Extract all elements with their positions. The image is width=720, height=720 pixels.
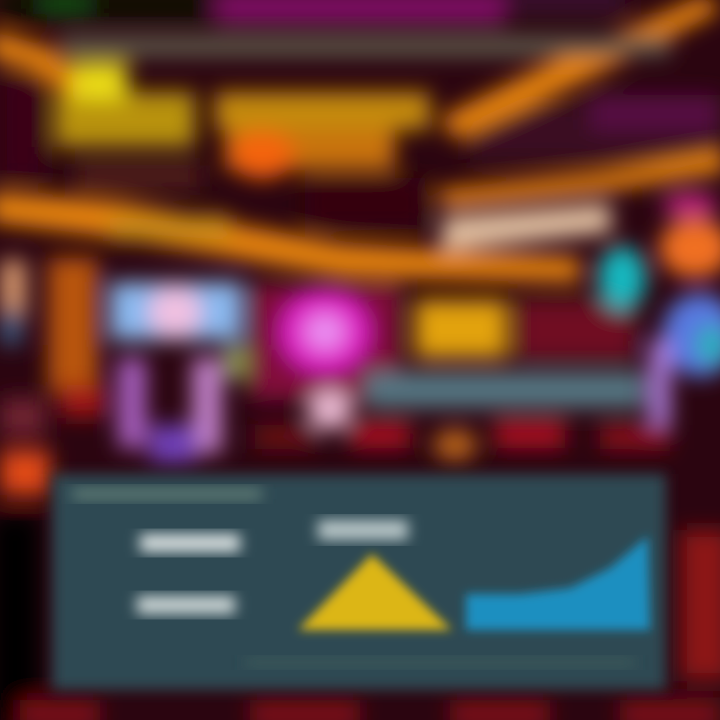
orange star (230, 131, 294, 179)
panel footer text (245, 658, 635, 667)
right rainbow (659, 218, 720, 278)
yellow headline (55, 62, 430, 241)
purple columns (118, 345, 247, 463)
chart heading (318, 520, 408, 540)
white highlight (308, 390, 352, 430)
area chart (466, 536, 650, 630)
lower side areas (0, 515, 720, 720)
dark brown patch under headline (75, 165, 200, 187)
ceiling colours (0, 0, 720, 228)
magenta circle (281, 292, 369, 372)
orange pillar (48, 258, 98, 393)
teal droplet (598, 246, 646, 310)
statistic one (140, 534, 240, 552)
white sub headline (442, 204, 612, 250)
grey blue caption (365, 372, 645, 408)
grey title band (60, 36, 670, 56)
panel: statistics (52, 474, 666, 690)
red crowd (0, 385, 670, 495)
orange ceiling beams (0, 0, 720, 282)
statistic two (137, 596, 235, 614)
blue white lights (110, 282, 242, 340)
triangle chart (298, 554, 452, 630)
yellow block (415, 300, 507, 358)
panel heading (72, 488, 262, 500)
